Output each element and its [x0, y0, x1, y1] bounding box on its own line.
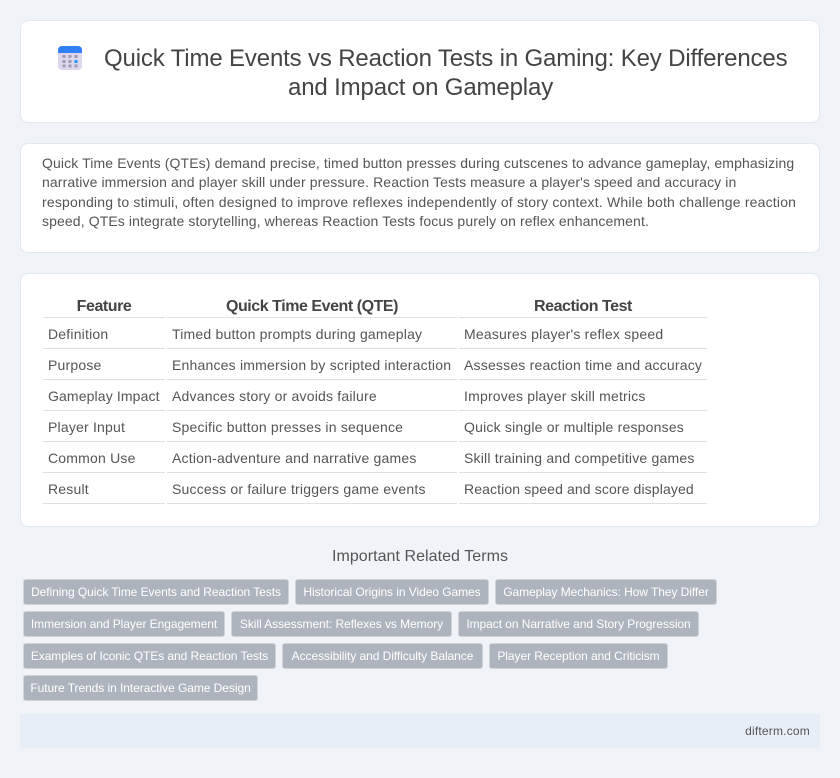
- footer: source: difterm.com: [745, 724, 810, 738]
- tags: related terms: Player Reception and Criticism: [497, 649, 660, 663]
- title: Quick Time Events vs Reaction Tests in Gaming: Key Differences: [104, 45, 787, 72]
- table: comparison: Enhances immersion by scripted interaction: [172, 357, 451, 373]
- table: comparison: Player Input: [48, 419, 125, 435]
- icon: calendar: [58, 46, 82, 70]
- footer bar: [20, 714, 820, 748]
- tags: related terms: Future Trends in Interactive Game Design: [30, 681, 251, 695]
- table: comparison: Success or failure triggers game events: [172, 481, 426, 497]
- table: comparison: Assesses reaction time and accuracy: [464, 357, 702, 373]
- table: comparison: [43, 298, 707, 504]
- panel: comparison table: [20, 273, 820, 527]
- table: comparison: Measures player's reflex speed: [464, 326, 663, 342]
- tags: related terms: Defining Quick Time Events and Reaction Tests: [31, 585, 281, 599]
- text block: summary: Quick Time Events (QTEs) demand precise, timed button presses during cutscenes to advance gameplay, emphasizing: [42, 155, 794, 171]
- table: comparison: Feature: [77, 298, 131, 315]
- text block: summary: responding to stimuli, often designed to improve reflexes independently of story context. While both challenge reaction: [42, 194, 796, 210]
- tags: related terms: Gameplay Mechanics: How They Differ: [503, 585, 709, 599]
- heading: important related terms: Important Related Terms: [332, 548, 508, 565]
- table: comparison: Result: [48, 481, 89, 497]
- panel: header: [20, 20, 820, 123]
- tags: related terms: Historical Origins in Video Games: [303, 585, 481, 599]
- table: comparison: Quick single or multiple responses: [464, 419, 684, 435]
- tags: related terms: Examples of Iconic QTEs and Reaction Tests: [31, 649, 268, 663]
- table: comparison: Advances story or avoids failure: [172, 388, 377, 404]
- title line 2: and Impact on Gameplay: [288, 74, 553, 101]
- table: comparison: Reaction Test: [534, 298, 632, 315]
- table: comparison: Specific button presses in sequence: [172, 419, 403, 435]
- tags: related terms: Skill Assessment: Reflexes vs Memory: [240, 617, 443, 631]
- table: comparison: Definition: [48, 326, 108, 342]
- table: comparison: Improves player skill metrics: [464, 388, 646, 404]
- table: comparison: Action-adventure and narrative games: [172, 450, 417, 466]
- text block: summary: speed, QTEs integrate storytelling, whereas Reaction Tests focus purely on reflex enhancement.: [42, 213, 649, 229]
- table: comparison: Skill training and competitive games: [464, 450, 695, 466]
- tags: related terms: [23, 579, 717, 701]
- tags: related terms: Accessibility and Difficulty Balance: [292, 649, 473, 663]
- tags: related terms: Immersion and Player Engagement: [31, 617, 217, 631]
- table: comparison: Gameplay Impact: [48, 388, 160, 404]
- table: comparison: Reaction speed and score displayed: [464, 481, 694, 497]
- panel: summary paragraph: [20, 143, 820, 253]
- table: comparison: Quick Time Event (QTE): [226, 298, 398, 315]
- table: comparison: Timed button prompts during gameplay: [172, 326, 422, 342]
- table: comparison: Purpose: [48, 357, 102, 373]
- table: comparison: Common Use: [48, 450, 136, 466]
- text block: summary: [42, 155, 796, 229]
- tags: related terms: Impact on Narrative and Story Progression: [466, 617, 691, 631]
- text block: summary: narrative immersion and player skill under pressure. Reaction Tests measure a player's speed and accuracy in: [42, 174, 736, 190]
